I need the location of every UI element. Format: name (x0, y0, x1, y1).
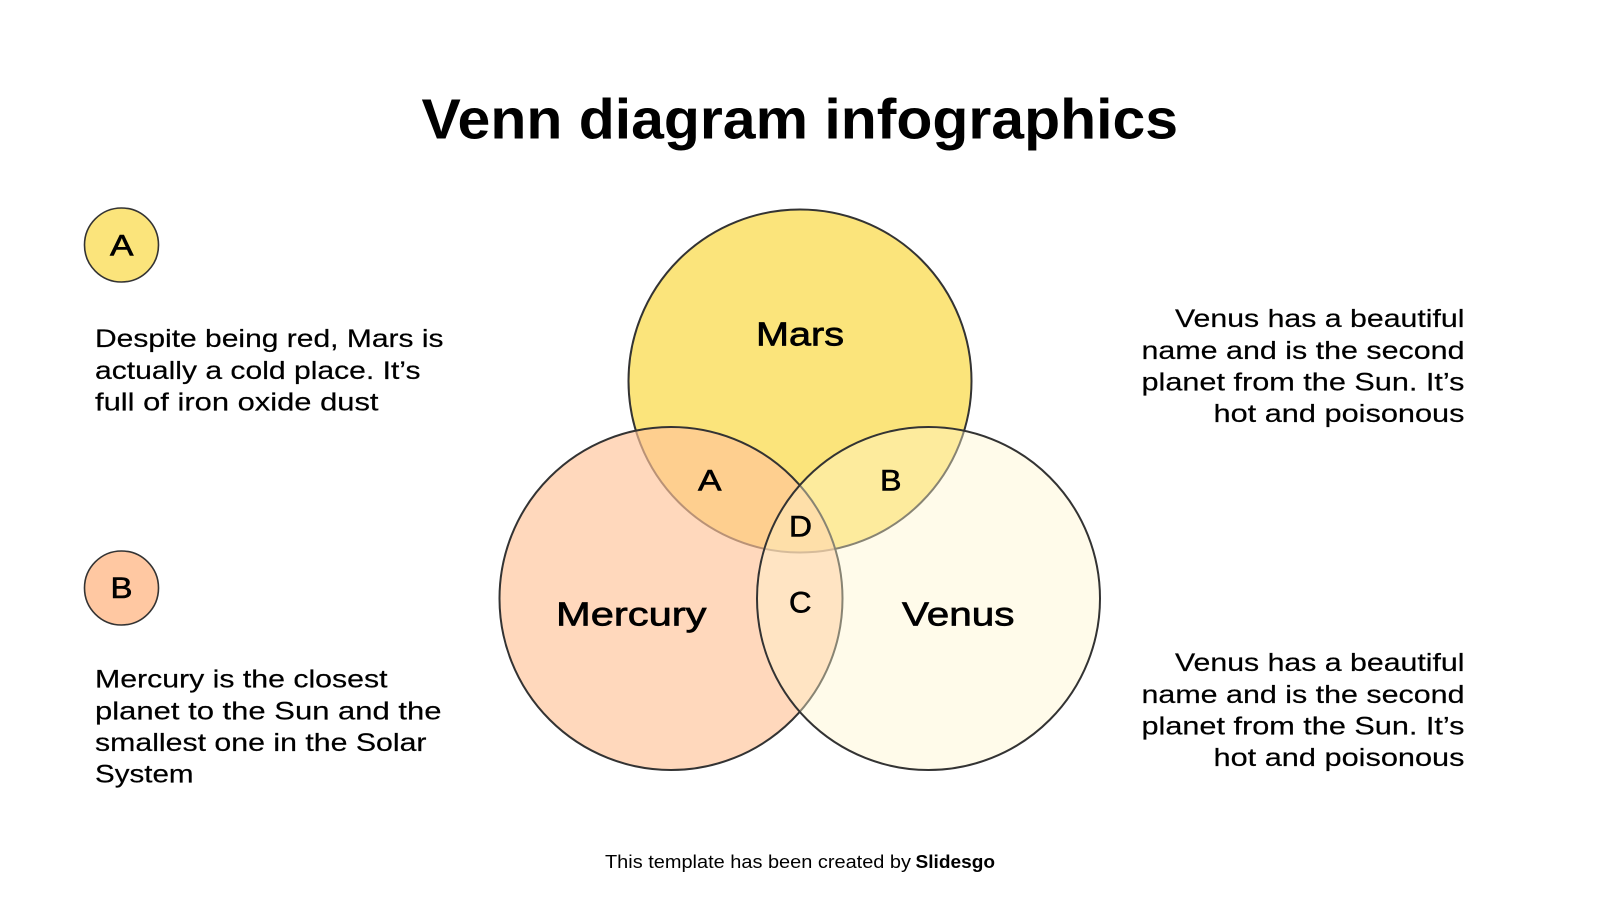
overlap label C: C (789, 586, 812, 620)
text block: Venus description bottom: planet from the Sun. It’s (1142, 712, 1464, 740)
text block: Venus description bottom (1142, 649, 1464, 772)
venn diagram (500, 210, 1100, 770)
circle: Mars (628, 210, 972, 552)
text block: Mars description: Despite being red, Mars is (95, 325, 444, 353)
text block: Venus description top: planet from the Sun. It’s (1142, 368, 1464, 396)
text block: Mercury description: Mercury is the closest (95, 666, 388, 694)
text block: Mercury description: System (95, 760, 194, 788)
overlap label A: A (698, 464, 722, 498)
label: Mars: Mars (756, 316, 844, 354)
text block: Mercury description: planet to the Sun and the (95, 698, 442, 726)
overlap label D: D (789, 510, 812, 544)
footer credit: This template has been created by (605, 852, 911, 872)
text block: Mars description (95, 325, 444, 416)
text block: Venus description top: hot and poisonous (1214, 400, 1464, 428)
text block: Mars description: full of iron oxide dust (95, 388, 379, 416)
footer credit: Slidesgo (916, 852, 995, 872)
text block: Mars description: actually a cold place. It’s (95, 357, 420, 385)
label: Venus: Venus (902, 596, 1014, 634)
text block: Venus description top (1142, 305, 1464, 428)
text block: Mercury description (95, 666, 442, 788)
legend badge B: B (110, 572, 132, 605)
text block: Venus description bottom: hot and poisonous (1214, 744, 1464, 772)
legend badge A (84, 208, 158, 282)
label: Mercury: Mercury (556, 596, 707, 634)
legend badge B (84, 551, 158, 625)
text block: Venus description top: name and is the second (1142, 337, 1464, 365)
circle: Venus (757, 427, 1100, 770)
text block: Venus description bottom: Venus has a beautiful (1175, 649, 1464, 677)
overlap label B: B (880, 464, 902, 498)
text block: Mercury description: smallest one in the Solar (95, 729, 426, 757)
text block: Venus description top: Venus has a beautiful (1175, 305, 1464, 333)
title: Venn diagram infographics (422, 88, 1178, 152)
legend badge A: A (110, 230, 134, 262)
circle: Mercury (500, 427, 842, 770)
text block: Venus description bottom: name and is the second (1142, 681, 1464, 709)
